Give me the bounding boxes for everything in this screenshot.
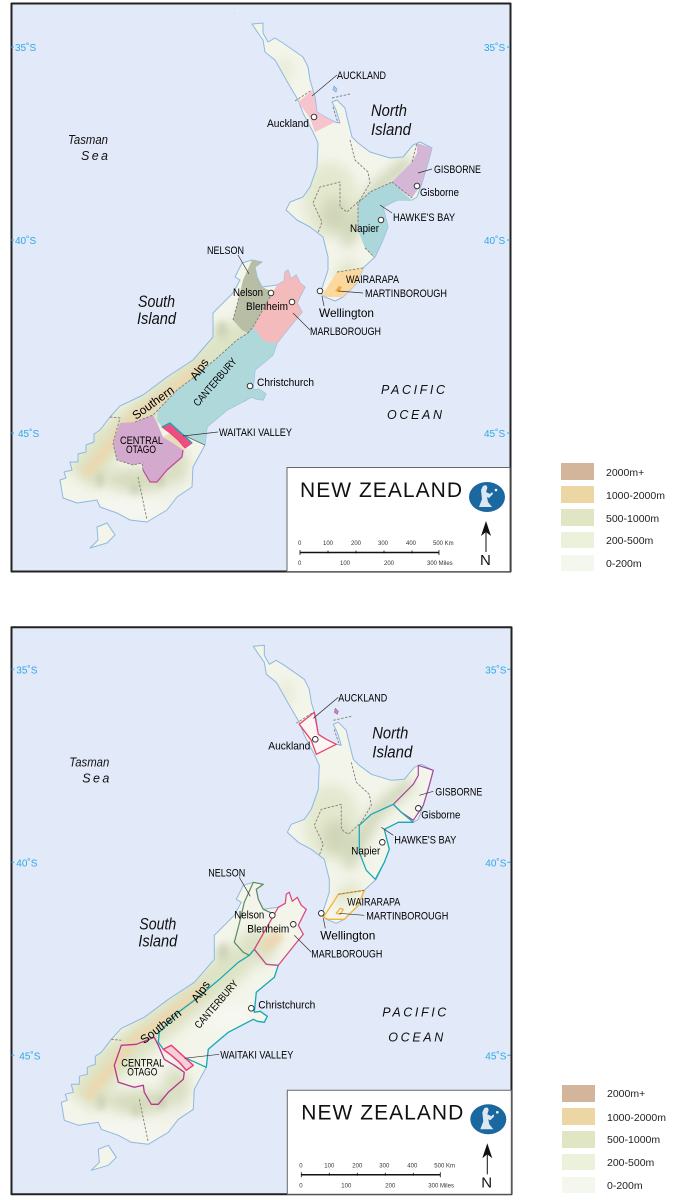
sea and island names: Tasman [68, 133, 108, 147]
scale bar: 0 [298, 561, 302, 567]
sea and island names [69, 723, 447, 1044]
map title: NEW ZEALAND [301, 1101, 463, 1124]
leader lines [183, 75, 432, 436]
place labels: WAITAKI VALLEY [220, 1049, 293, 1061]
place labels: Alps [187, 356, 212, 383]
place labels: Southern [130, 383, 177, 422]
sea and island names: South [139, 914, 176, 933]
place labels: Wellington [319, 306, 374, 320]
place labels: CENTRAL [120, 435, 163, 447]
sea and island names: OCEAN [388, 1030, 444, 1044]
place labels: CANTERBURY [191, 356, 240, 409]
scale bar: 400 [407, 1163, 418, 1169]
legend 2: 0-200m [607, 1180, 643, 1192]
scale bar: 300 [378, 541, 389, 547]
sea and island names: Island [138, 931, 178, 950]
legend 1: 500-1000m [606, 513, 659, 525]
place labels: Gisborne [421, 809, 460, 821]
scale bar [298, 541, 454, 567]
outlined wine regions [114, 712, 433, 1104]
place labels: AUCKLAND [337, 70, 386, 82]
place labels: Nelson [234, 909, 264, 921]
sea and island names: OCEAN [387, 408, 443, 422]
place labels: Nelson [233, 287, 263, 299]
icon: logo [469, 482, 505, 512]
land: North and South Island with terrain [60, 644, 434, 1171]
scale bar: 300 Miles [427, 561, 453, 567]
place labels: HAWKE'S BAY [393, 212, 455, 224]
place labels: HAWKE'S BAY [394, 834, 456, 846]
latitude labels: 40˚S [485, 857, 507, 869]
icon: logo [470, 1104, 506, 1134]
city markers [248, 736, 421, 1011]
title box with scale and north arrow [287, 1090, 511, 1194]
place labels: Christchurch [257, 377, 314, 389]
sea and island names: North [372, 723, 408, 742]
legend 1: 2000m+ [606, 467, 644, 479]
scale bar [299, 1163, 455, 1189]
place labels: Napier [350, 223, 379, 235]
latitude labels: 35˚S [15, 42, 36, 54]
latitude labels: 45˚S [485, 1050, 507, 1062]
sea and island names: North [371, 101, 407, 120]
scale bar: 0 [298, 541, 302, 547]
latitude labels: 45˚S [19, 1050, 41, 1062]
title box with scale and north arrow [287, 468, 510, 572]
scale bar: 0 [299, 1183, 303, 1189]
map panel: shaded regions [11, 4, 510, 572]
latitude labels [11, 664, 510, 1062]
north arrow: N [480, 552, 491, 569]
place labels: Blenheim [247, 923, 289, 935]
latitude labels: 35˚S [484, 42, 505, 54]
place labels: CANTERBURY [193, 978, 241, 1031]
place labels: WAITAKI VALLEY [219, 427, 292, 439]
place labels: AUCKLAND [338, 692, 388, 704]
place labels: Wellington [320, 928, 375, 942]
land: North and South Island with terrain [60, 12, 432, 548]
place labels: Auckland [268, 740, 310, 752]
legend 2: 2000m+ [607, 1088, 645, 1100]
legend 2: 500-1000m [607, 1134, 660, 1146]
sea and island names: Sea [82, 771, 109, 785]
place labels [121, 692, 482, 1078]
scale bar: 100 [341, 1183, 352, 1189]
north arrow [481, 1143, 492, 1191]
latitude labels: 40˚S [16, 857, 38, 869]
sea and island names: Island [371, 120, 411, 139]
sea and island names: PACIFIC [381, 383, 446, 397]
latitude labels: 45˚S [484, 428, 505, 440]
place labels: Gisborne [420, 187, 459, 199]
place labels: GISBORNE [435, 786, 482, 798]
place labels: Christchurch [258, 999, 315, 1011]
sea and island names: PACIFIC [382, 1005, 447, 1019]
legend 1: 200-500m [606, 535, 654, 547]
place labels: MARTINBOROUGH [365, 288, 447, 300]
place labels: GISBORNE [434, 164, 481, 176]
place labels: Southern [138, 1006, 184, 1047]
scale bar: 100 [324, 1163, 335, 1169]
scale bar: 400 [406, 541, 417, 547]
place labels: WAIRARAPA [347, 896, 401, 908]
place labels: Alps [188, 978, 213, 1005]
north arrow [480, 521, 491, 569]
regional boundaries [110, 90, 417, 520]
sea and island names: Sea [81, 149, 108, 163]
sea background and frame [12, 4, 510, 572]
regional boundaries [111, 712, 371, 1142]
sea and island names [68, 101, 446, 422]
city markers [247, 114, 420, 389]
place labels: OTAGO [127, 1066, 157, 1078]
sea and island names: Island [137, 309, 176, 328]
latitude labels: 40˚S [15, 235, 36, 247]
latitude labels: 35˚S [485, 664, 507, 676]
leader lines [184, 697, 433, 1058]
legend 1: 0-200m [606, 558, 642, 570]
scale bar: 200 [352, 1163, 363, 1169]
latitude labels: 40˚S [484, 235, 505, 247]
scale bar: 100 [323, 541, 334, 547]
north arrow: N [481, 1174, 492, 1191]
legend 2: 1000-2000m [607, 1112, 666, 1124]
place labels: OTAGO [126, 444, 156, 456]
sea and island names: Island [372, 742, 413, 761]
scale bar: 200 [385, 1183, 396, 1189]
latitude labels: 45˚S [18, 428, 39, 440]
legend 1: 1000-2000m [606, 490, 665, 502]
scale bar: 500 Km [433, 541, 454, 547]
place labels: MARTINBOROUGH [366, 910, 448, 922]
place labels: MARLBOROUGH [310, 326, 381, 338]
legend 2: 200-500m [607, 1157, 655, 1169]
scale bar: 200 [384, 561, 395, 567]
place labels: WAIRARAPA [346, 274, 400, 286]
place labels: Napier [351, 845, 381, 857]
scale bar: 100 [340, 561, 351, 567]
place labels: MARLBOROUGH [311, 948, 382, 960]
place labels: CENTRAL [121, 1057, 164, 1069]
sea and island names: South [138, 292, 175, 311]
latitude labels: 35˚S [16, 664, 38, 676]
place labels [120, 70, 481, 456]
place labels: NELSON [207, 245, 244, 257]
scale bar: 500 Km [434, 1163, 455, 1169]
latitude labels [11, 42, 510, 440]
filled wine regions [113, 90, 432, 482]
scale bar: 300 [379, 1163, 390, 1169]
scale bar: 0 [299, 1163, 303, 1169]
legend 1 [561, 463, 665, 571]
sea and island names: Tasman [69, 755, 109, 769]
place labels: Blenheim [246, 301, 288, 313]
map panel: outlined regions [11, 627, 512, 1194]
place labels: NELSON [208, 867, 245, 879]
map title: NEW ZEALAND [300, 479, 462, 502]
place labels: Auckland [267, 118, 309, 130]
scale bar: 300 Miles [428, 1183, 454, 1189]
scale bar: 200 [351, 541, 362, 547]
sea background and frame [12, 627, 512, 1194]
legend 2 [562, 1085, 666, 1193]
